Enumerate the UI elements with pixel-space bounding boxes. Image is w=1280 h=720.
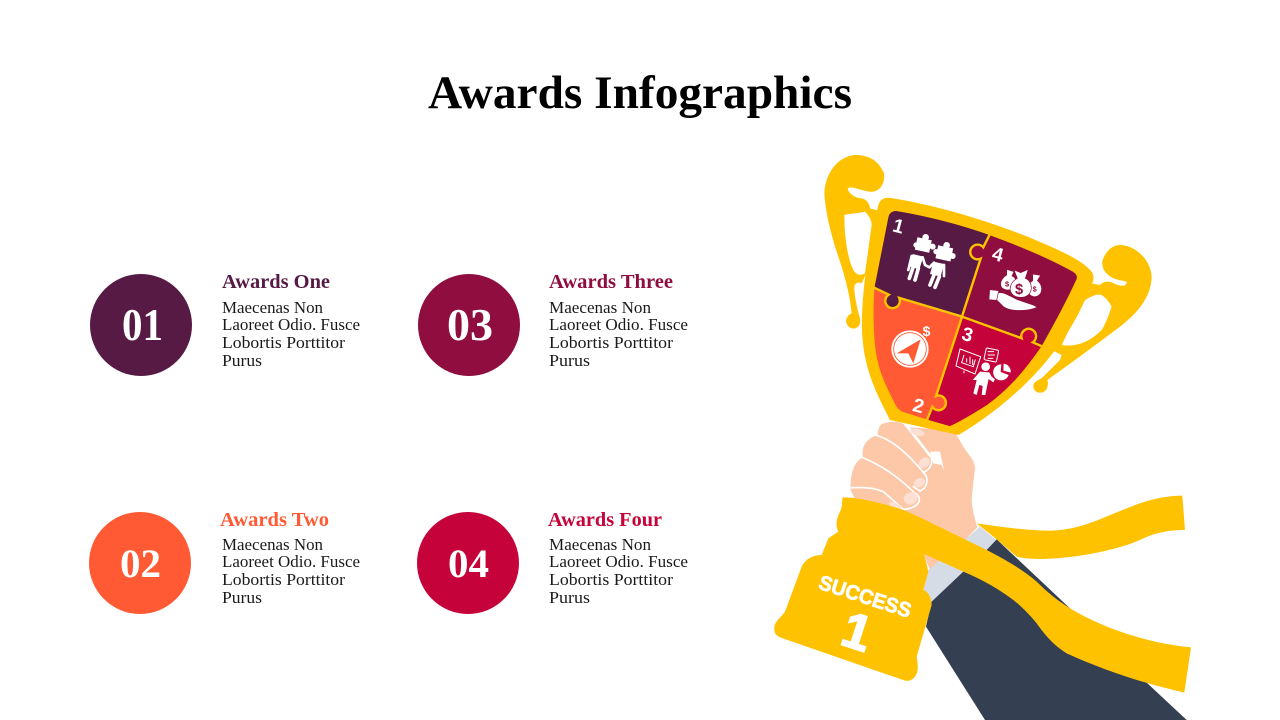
body text one <box>222 298 360 370</box>
number badge 02: 02 <box>120 541 161 586</box>
puzzle numbers: 4 <box>990 244 1006 267</box>
item: Awards Three <box>418 271 688 376</box>
body text two: Lobortis Porttitor <box>222 570 346 589</box>
label: rank 1: 1 <box>835 601 879 663</box>
trophy cup <box>824 155 1152 435</box>
hand <box>851 421 977 570</box>
cup rim <box>862 198 1093 435</box>
left handle <box>824 155 884 329</box>
body text four: Lobortis Porttitor <box>549 570 674 589</box>
body text three <box>549 298 688 370</box>
number badge 02 <box>89 512 191 614</box>
icon: presenter with charts <box>956 348 1011 395</box>
heading: Awards Two: Awards Two <box>220 509 329 531</box>
number badge 01: 01 <box>122 299 163 350</box>
puzzle piece 3 <box>927 317 1043 427</box>
icon: compass <box>891 323 931 368</box>
back ribbon <box>977 496 1185 559</box>
puzzle piece 1 <box>873 210 990 317</box>
puzzle numbers: 1 <box>890 216 906 239</box>
puzzle numbers <box>890 216 1006 418</box>
body text three: Lobortis Porttitor <box>549 333 674 352</box>
heading: Awards Three: Awards Three <box>549 271 673 293</box>
label: SUCCESS: SUCCESS <box>816 571 914 623</box>
number badge 03 <box>418 274 520 376</box>
icon: money bags in hand: $ <box>1005 280 1009 289</box>
body text four: Maecenas Non <box>549 535 651 554</box>
item: Awards Four <box>417 509 688 614</box>
body text two: Maecenas Non <box>222 535 323 554</box>
shirt cuff <box>923 527 997 603</box>
icon: compass: $ <box>923 323 931 339</box>
fingernails <box>888 427 932 511</box>
body text four <box>549 535 688 607</box>
body text two: Laoreet Odio. Fusce <box>222 552 360 571</box>
number badge 04: 04 <box>448 541 489 586</box>
body text one: Laoreet Odio. Fusce <box>222 315 360 334</box>
title: Awards Infographics <box>428 67 852 119</box>
item: Awards Two <box>89 509 360 614</box>
icon: businessmen with puzzle heads <box>908 234 956 287</box>
number badge 03: 03 <box>447 299 493 350</box>
body text one: Lobortis Porttitor <box>222 333 346 352</box>
puzzle piece 4 <box>962 234 1078 347</box>
illustration: arm, ribbon and trophy base <box>774 421 1191 720</box>
trophy base and front ribbon <box>774 497 1191 693</box>
body text two <box>222 535 360 607</box>
heading: Awards One: Awards One <box>222 271 330 293</box>
body text four: Laoreet Odio. Fusce <box>549 552 688 571</box>
puzzle numbers: 3 <box>959 324 975 347</box>
icon: money bags in hand: $ <box>1015 282 1023 298</box>
suit sleeve <box>926 539 1187 720</box>
number badge 01 <box>90 274 192 376</box>
body text one: Purus <box>222 351 262 370</box>
puzzle numbers: 2 <box>910 395 926 418</box>
body text three: Purus <box>549 351 590 370</box>
heading: Awards Four: Awards Four <box>548 509 662 531</box>
body text two: Purus <box>222 588 262 607</box>
body text three: Maecenas Non <box>549 298 651 317</box>
right handle <box>1033 245 1152 393</box>
item: Awards One <box>90 271 360 376</box>
body text four: Purus <box>549 588 590 607</box>
puzzle piece 2 <box>872 287 962 421</box>
icon: money bags in hand <box>989 269 1042 311</box>
body text three: Laoreet Odio. Fusce <box>549 315 688 334</box>
number badge 04 <box>417 512 519 614</box>
body text one: Maecenas Non <box>222 298 323 317</box>
icon: money bags in hand: $ <box>1033 285 1037 294</box>
